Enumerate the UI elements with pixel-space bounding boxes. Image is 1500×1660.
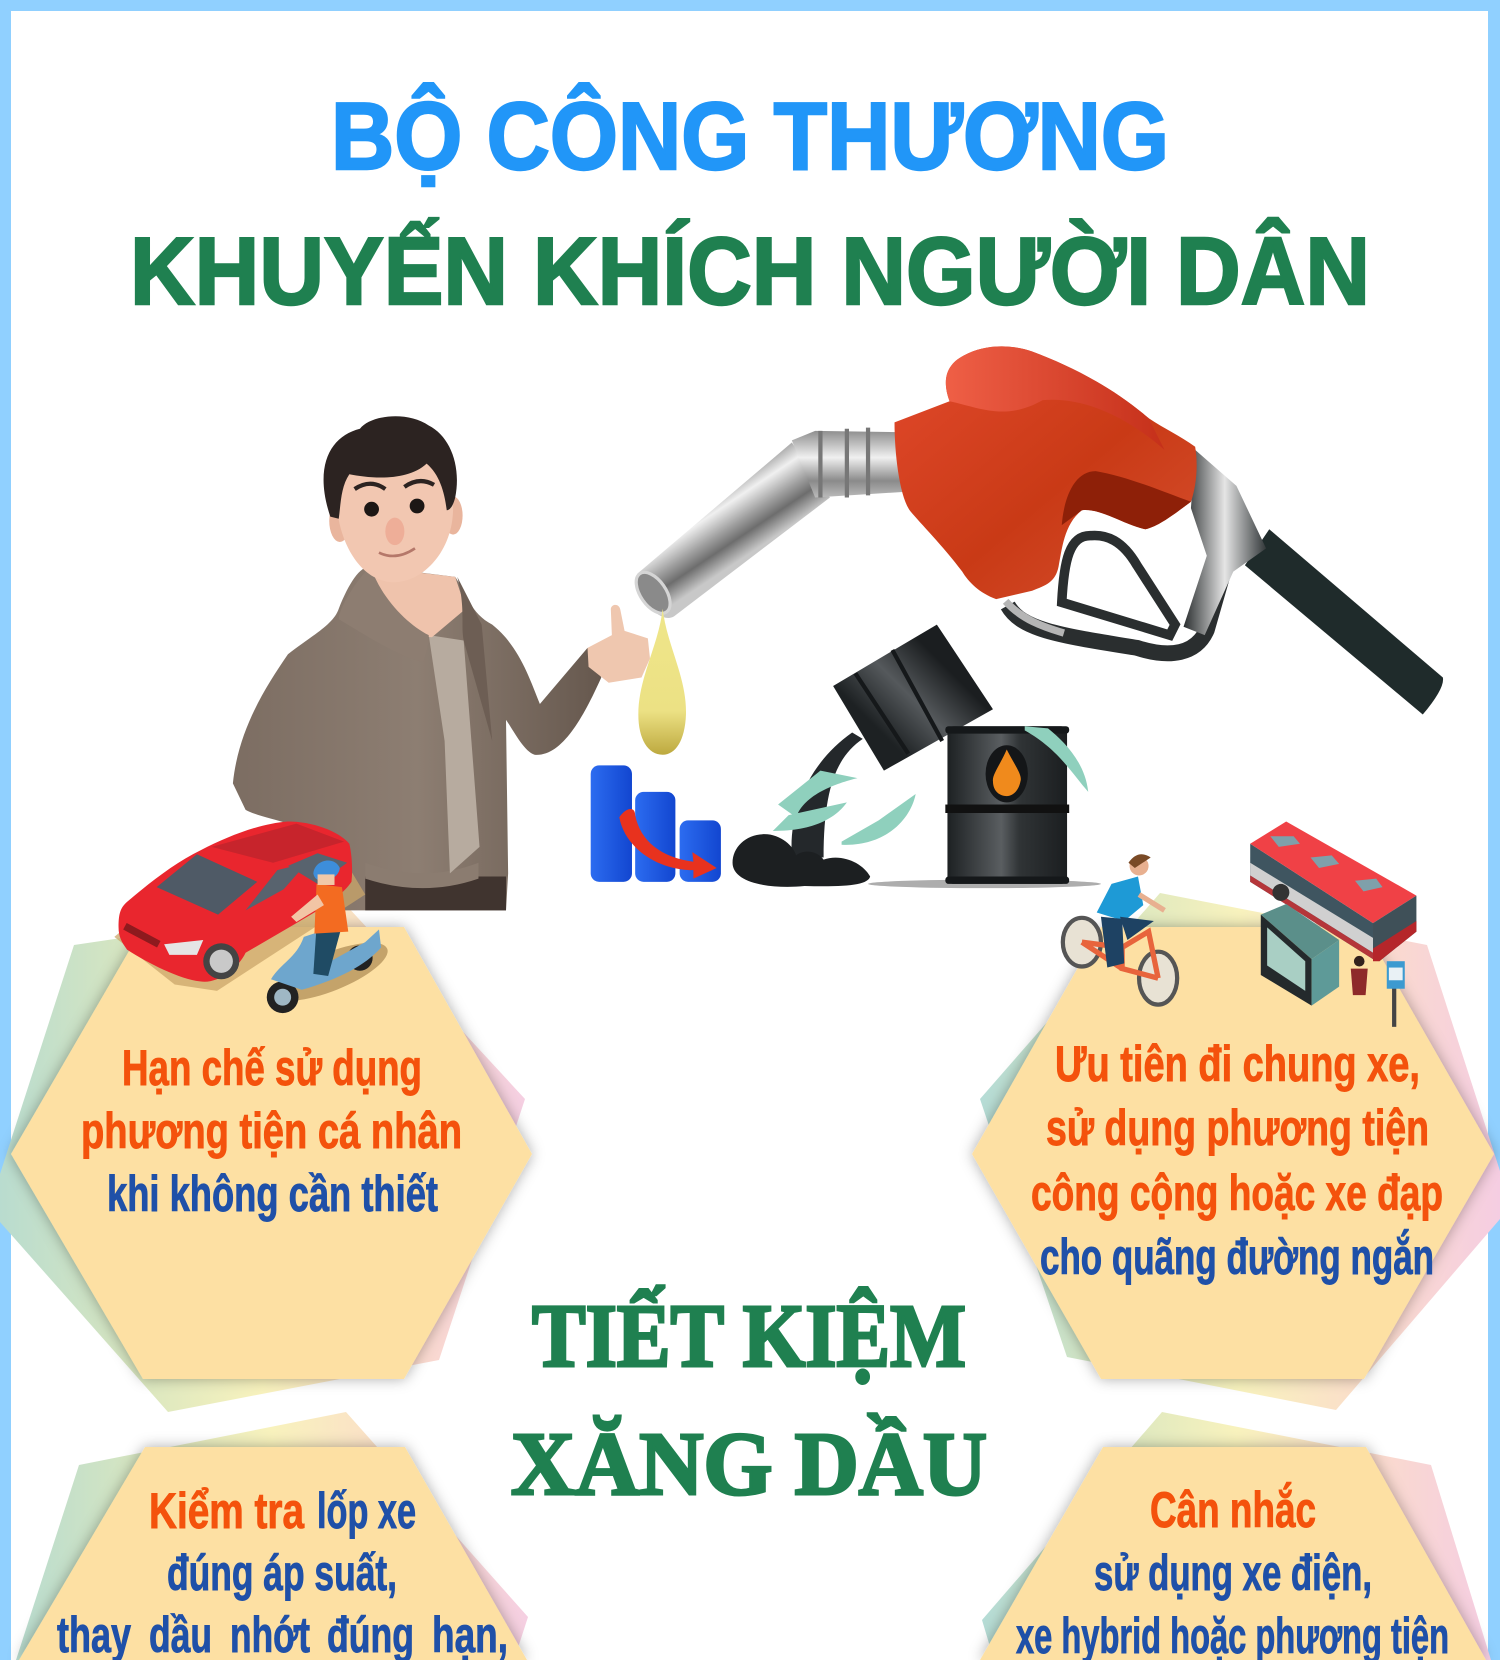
panel: check tyres: đúng áp suất, — [167, 1545, 397, 1601]
icon: red car — [114, 821, 365, 991]
panel: limit personal vehicles — [0, 905, 532, 1412]
panel: consider electric vehicles: Cân nhắc — [1150, 1482, 1316, 1538]
center heading: XĂNG DẦU — [511, 1413, 987, 1514]
icon: fuel drop — [638, 609, 686, 755]
icon: falling bar chart — [591, 765, 721, 882]
panel: consider electric vehicles — [980, 1412, 1491, 1660]
panel: check tyres: lốp xe — [317, 1483, 416, 1539]
panel: public transport — [972, 893, 1500, 1410]
icon: man — [233, 416, 650, 910]
panel: check tyres — [16, 1412, 528, 1660]
icon: scooter rider — [266, 860, 394, 1013]
illustration group — [114, 346, 1443, 1027]
panel: limit personal vehicles: Hạn chế sử dụng — [122, 1040, 422, 1096]
title: BỘ CÔNG THƯƠNG — [331, 82, 1169, 190]
icon: bus and stop — [1250, 821, 1416, 1027]
icon: fuel nozzle — [629, 346, 1443, 715]
panel: consider electric vehicles: sử dụng xe điện, — [1094, 1545, 1372, 1601]
panel: limit personal vehicles: khi không cần thiết — [107, 1166, 438, 1222]
panel: check tyres: Kiểm tra — [149, 1483, 305, 1539]
icon: oil barrels — [733, 625, 1101, 888]
icon: cyclist — [1063, 854, 1177, 1005]
center heading — [511, 1284, 987, 1514]
title: KHUYẾN KHÍCH NGƯỜI DÂN — [130, 217, 1370, 325]
title — [130, 82, 1370, 325]
center heading: TIẾT KIỆM — [532, 1284, 966, 1386]
panel: limit personal vehicles: phương tiện cá nhân — [81, 1103, 462, 1159]
